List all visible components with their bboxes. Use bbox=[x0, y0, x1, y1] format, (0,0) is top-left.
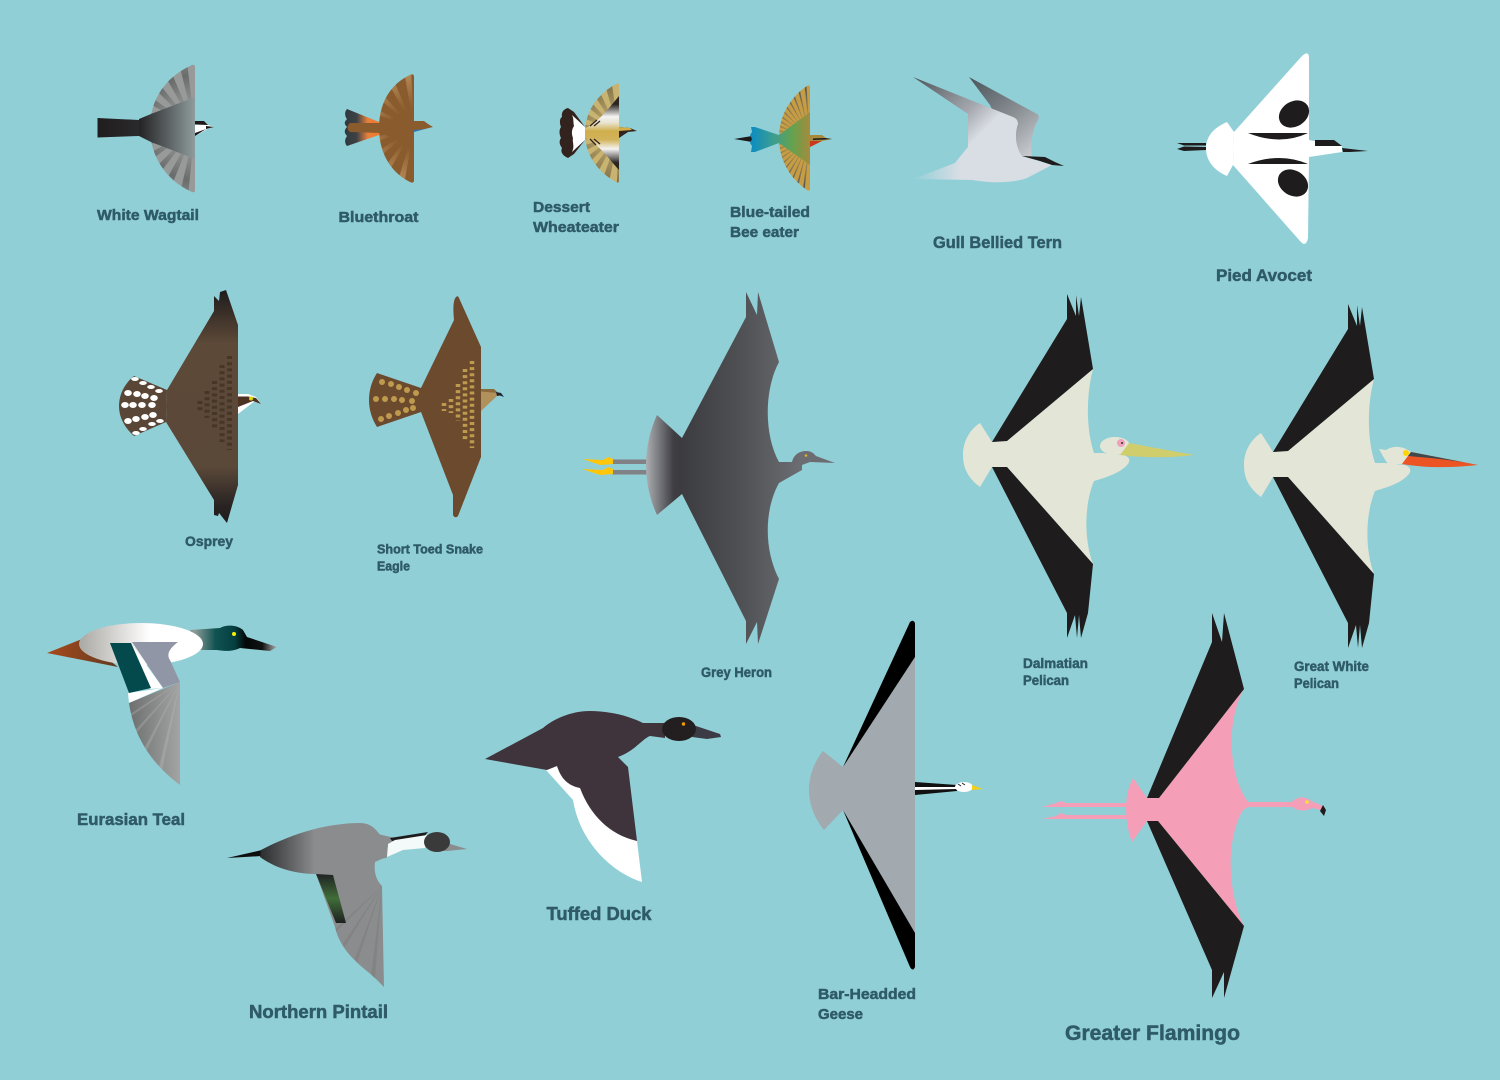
avocet wings and body bbox=[1233, 53, 1342, 244]
duck body and wing bbox=[485, 711, 665, 841]
bird: Grey Heron bbox=[582, 292, 835, 644]
bird: Tuffed Duck bbox=[485, 711, 721, 882]
label: Dalmatian Pelican: Dalmatian bbox=[1023, 655, 1088, 671]
dalmatian eye bbox=[1117, 439, 1125, 447]
wheateater flank marks bbox=[590, 120, 600, 145]
label: Dessert Wheateater: Wheateater bbox=[533, 219, 619, 236]
label: Dalmatian Pelican bbox=[1023, 655, 1088, 688]
geese grey wings bbox=[843, 657, 915, 933]
dalmatian head bbox=[1100, 437, 1130, 455]
label: Blue-tailed Bee eater: Blue-tailed bbox=[730, 204, 810, 221]
wagtail tail bbox=[98, 118, 139, 138]
bird: Dalmatian Pelican bbox=[963, 294, 1194, 638]
osprey tail marks bbox=[121, 377, 164, 435]
bluethroat head bbox=[414, 121, 433, 131]
label: Bar-Headded Geese bbox=[818, 986, 916, 1023]
bird: Greater Flamingo bbox=[1042, 613, 1326, 998]
label: Short Toed Snake Eagle bbox=[377, 542, 483, 574]
teal head and neck bbox=[190, 626, 277, 651]
heron wings, body, neck bbox=[682, 292, 835, 644]
label: Blue-tailed Bee eater bbox=[730, 204, 810, 241]
avocet wing ovals bbox=[1248, 95, 1314, 202]
label: Tuffed Duck: Tuffed Duck bbox=[546, 904, 653, 924]
osprey wing spots bbox=[200, 356, 230, 450]
flamingo tail, body and wing bbox=[1126, 689, 1292, 926]
avocet legs bbox=[1177, 143, 1206, 151]
label: Dessert Wheateater bbox=[533, 199, 619, 236]
label: Northern Pintail: Northern Pintail bbox=[249, 1002, 388, 1022]
pintail white neck patch bbox=[387, 835, 427, 857]
pintail neck bbox=[375, 834, 395, 860]
bluethroat tail bbox=[345, 109, 379, 146]
bird: Northern Pintail bbox=[227, 823, 467, 987]
label: Dalmatian Pelican: Pelican bbox=[1023, 672, 1069, 688]
wheateater wing bbox=[585, 83, 619, 183]
bird: Great White Pelican bbox=[1244, 304, 1478, 648]
teal wing fan bbox=[129, 682, 180, 785]
label: Bluethroat: Bluethroat bbox=[338, 209, 419, 226]
great white head bbox=[1379, 447, 1411, 464]
label: Osprey: Osprey bbox=[185, 533, 233, 549]
eagle wing spots bbox=[444, 361, 472, 448]
dalmatian lower black wing bbox=[992, 467, 1093, 638]
eagle wings bbox=[421, 296, 481, 517]
great white eye bbox=[1403, 450, 1409, 456]
label: Bar-Headded Geese: Geese bbox=[818, 1006, 863, 1023]
pintail speculum bbox=[316, 874, 346, 923]
geese tail bbox=[809, 751, 843, 830]
label: Short Toed Snake Eagle: Short Toed Snake bbox=[377, 542, 483, 556]
flamingo upper black wing bbox=[1147, 613, 1244, 798]
eagle head bbox=[481, 389, 498, 411]
duck eye bbox=[682, 722, 685, 726]
label: Eurasian Teal: Eurasian Teal bbox=[77, 810, 185, 829]
geese neck bbox=[915, 782, 957, 795]
label: Greater Flamingo: Greater Flamingo bbox=[1065, 1022, 1240, 1045]
duck bill bbox=[692, 725, 721, 739]
flamingo head and bill bbox=[1291, 797, 1323, 810]
avocet cap and bill bbox=[1315, 140, 1368, 152]
teal tail bbox=[47, 639, 118, 667]
pintail tail spike bbox=[227, 850, 262, 858]
pintail bill bbox=[432, 838, 467, 851]
bird: Gull Bellied Tern bbox=[913, 77, 1064, 182]
flamingo lower black wing bbox=[1147, 821, 1244, 998]
bee eater wing bbox=[779, 85, 810, 191]
flamingo legs bbox=[1042, 801, 1127, 819]
duck white wing edge bbox=[546, 766, 642, 882]
tern near wing and body bbox=[913, 77, 1052, 182]
tern tail bbox=[913, 147, 975, 180]
duck head bbox=[662, 717, 696, 741]
label: Great White Pelican: Pelican bbox=[1294, 675, 1339, 691]
great white bill bbox=[1402, 452, 1478, 467]
label: Grey Heron: Grey Heron bbox=[701, 664, 772, 680]
tern black cap and bill bbox=[1022, 156, 1064, 166]
great white upper black wing bbox=[1273, 304, 1374, 452]
bird: Eurasian Teal bbox=[47, 623, 277, 785]
bird: Bluethroat bbox=[345, 74, 443, 183]
bird: Short Toed Snake Eagle bbox=[369, 296, 504, 517]
label: Bar-Headded Geese: Bar-Headded bbox=[818, 986, 916, 1003]
wheateater body bbox=[585, 96, 619, 170]
pintail body and wing bbox=[260, 823, 388, 987]
teal white wing bars bbox=[128, 645, 163, 703]
bluethroat wing bbox=[379, 74, 414, 183]
wheateater tail bbox=[560, 108, 585, 158]
label: Dessert Wheateater: Dessert bbox=[533, 199, 590, 216]
dalmatian tail and body bbox=[963, 369, 1129, 564]
wagtail body bbox=[139, 97, 195, 159]
tern far wing bbox=[969, 77, 1039, 157]
heron tail bbox=[646, 415, 682, 515]
bird: Dessert Wheateater bbox=[560, 83, 645, 183]
osprey head bbox=[238, 394, 261, 414]
geese head bbox=[955, 782, 973, 792]
label: Gull Bellied Tern: Gull Bellied Tern bbox=[933, 233, 1062, 252]
bird: White Wagtail bbox=[98, 64, 214, 192]
heron legs and feet bbox=[582, 457, 647, 475]
bee eater tail spike bbox=[734, 136, 752, 142]
label: Great White Pelican bbox=[1294, 658, 1369, 691]
great white lower black wing bbox=[1273, 477, 1374, 648]
label: White Wagtail: White Wagtail bbox=[97, 207, 199, 224]
bluethroat body bbox=[348, 110, 414, 147]
bird: Pied Avocet bbox=[1177, 53, 1368, 244]
dalmatian bill bbox=[1120, 443, 1194, 457]
great white tail and body bbox=[1244, 379, 1410, 574]
geese black upper wing tip bbox=[843, 621, 915, 767]
bee eater body and tail bbox=[750, 112, 810, 165]
pintail fan bbox=[336, 892, 382, 978]
wagtail fan wing bbox=[150, 65, 195, 192]
flamingo eye bbox=[1305, 800, 1309, 804]
teal speculum bbox=[110, 643, 151, 693]
dalmatian upper black wing bbox=[992, 294, 1093, 442]
wagtail head bbox=[195, 121, 214, 136]
bee eater head bbox=[810, 135, 832, 147]
label: Short Toed Snake Eagle: Eagle bbox=[377, 558, 410, 574]
osprey tail bbox=[119, 376, 167, 436]
osprey wings bbox=[166, 290, 238, 523]
wheateater head bbox=[619, 127, 637, 138]
avocet tail bbox=[1206, 122, 1234, 176]
bird: Bar-Headded Geese bbox=[809, 621, 983, 970]
pintail head bbox=[424, 832, 450, 852]
pintail black neck stripe bbox=[390, 832, 428, 841]
teal blue-grey wing covert bbox=[132, 642, 180, 688]
bird: Osprey bbox=[119, 290, 261, 523]
teal body bbox=[79, 623, 203, 665]
label: Blue-tailed Bee eater: Bee eater bbox=[730, 224, 799, 241]
bird: Blue-tailed Bee eater bbox=[734, 85, 838, 191]
label: Pied Avocet: Pied Avocet bbox=[1216, 266, 1312, 285]
label: Great White Pelican: Great White bbox=[1294, 658, 1369, 674]
geese black lower wing tip bbox=[843, 810, 915, 970]
eagle tail marks bbox=[373, 379, 419, 422]
eagle tail bbox=[369, 373, 421, 427]
heron eye bbox=[805, 454, 807, 457]
